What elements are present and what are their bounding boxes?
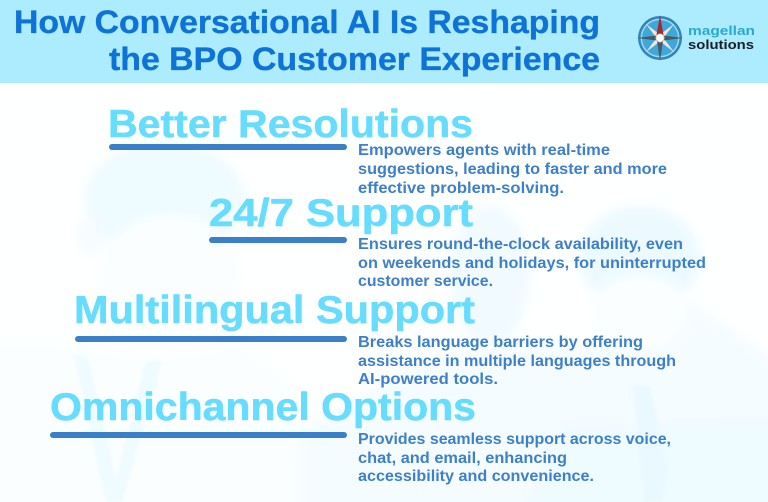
logo: Magellan Solutions: solutions	[688, 37, 754, 52]
description: AI-powered tools.	[358, 371, 498, 388]
underline bar	[75, 336, 347, 342]
underline bar	[209, 237, 347, 243]
title	[14, 4, 600, 77]
icon: compass	[637, 15, 683, 61]
title: How Conversational AI Is Reshaping	[14, 4, 600, 40]
item: Multilingual Support	[74, 289, 676, 388]
description: accessibility and convenience.	[358, 468, 594, 485]
heading: Better Resolutions	[108, 103, 473, 146]
item: 24/7 Support	[209, 192, 706, 290]
underline bar	[50, 432, 347, 438]
description	[358, 431, 671, 485]
header banner	[0, 0, 768, 83]
description: assistance in multiple languages through	[358, 353, 676, 370]
underline bar	[109, 144, 347, 150]
description: on weekends and holidays, for uninterrupted	[358, 255, 706, 272]
logo: Magellan Solutions	[637, 15, 755, 61]
heading: 24/7 Support	[209, 192, 473, 235]
description: Provides seamless support across voice,	[358, 431, 671, 448]
description	[358, 334, 676, 388]
description	[358, 236, 706, 290]
heading: Omnichannel Options	[50, 386, 476, 429]
heading: Multilingual Support	[74, 289, 475, 332]
description	[358, 142, 667, 197]
description: effective problem-solving.	[358, 180, 564, 197]
item: Omnichannel Options	[50, 386, 671, 485]
item: Better Resolutions	[108, 103, 667, 197]
description: Ensures round-the-clock availability, even	[358, 236, 683, 253]
description: Breaks language barriers by offering	[358, 334, 643, 351]
description: Empowers agents with real-time	[358, 142, 610, 159]
description: chat, and email, enhancing	[358, 450, 567, 467]
logo: Magellan Solutions: magellan	[688, 23, 755, 38]
description: suggestions, leading to faster and more	[358, 161, 667, 178]
title: the BPO Customer Experience	[109, 41, 600, 77]
description: customer service.	[358, 273, 493, 290]
